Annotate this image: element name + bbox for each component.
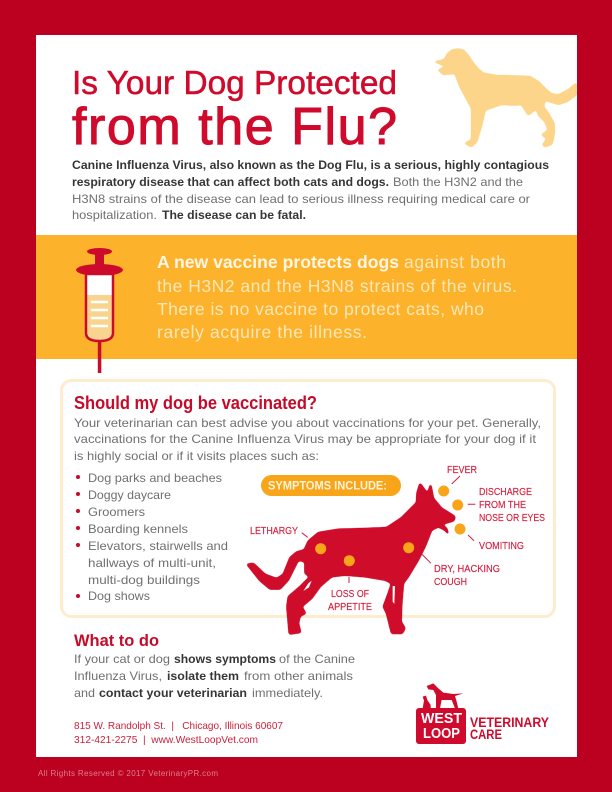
what to do text: shows symptoms <box>174 652 276 666</box>
logo: West Loop Veterinary Care: LOOP <box>423 726 460 742</box>
vaccination paragraph <box>74 416 541 463</box>
intro text <box>72 158 549 222</box>
symptom labels: LOSS OF <box>331 589 369 600</box>
what to do text: immediately. <box>252 686 323 700</box>
symptoms pill <box>261 475 401 496</box>
bullet list: Groomers <box>88 505 145 519</box>
what to do text: of the Canine <box>279 652 355 666</box>
bullet list <box>76 471 228 603</box>
title <box>72 64 397 156</box>
vaccine text <box>157 252 517 342</box>
what to do text: isolate them <box>167 669 239 683</box>
copyright footer: All Rights Reserved © 2017 VeterinaryPR.com <box>38 769 218 778</box>
bullet list: Dog parks and beaches <box>88 471 222 485</box>
logo: West Loop Veterinary Care: CARE <box>470 727 502 742</box>
symptoms pill: SYMPTOMS INCLUDE: <box>268 478 387 492</box>
symptom labels: LETHARGY <box>250 526 298 537</box>
symptom points near head <box>438 486 466 534</box>
bullet list: Doggy daycare <box>88 488 171 502</box>
contact details: 312-421-2275 | www.WestLoopVet.com <box>74 734 258 746</box>
intro text: hospitalization. <box>72 208 157 222</box>
symptom labels: DRY, HACKING <box>434 564 500 575</box>
title: Is Your Dog Protected <box>72 64 397 101</box>
intro text: H3N8 strains of the disease can lead to serious illness requiring medical care or <box>72 192 530 206</box>
symptom labels: VOMITING <box>479 541 524 552</box>
bullet list: Boarding kennels <box>88 522 188 536</box>
symptom labels: FROM THE <box>479 500 526 511</box>
intro text: Canine Influenza Virus, also known as the Dog Flu, is a serious, highly contagious <box>72 158 549 172</box>
icon: logo dogs <box>423 683 463 708</box>
contact details <box>74 720 283 746</box>
symptom labels: NOSE OR EYES <box>479 513 545 524</box>
icon: golden dog silhouette <box>435 49 576 147</box>
intro text: Both the H3N2 and the <box>393 175 523 189</box>
what to do text: If your cat or dog <box>74 652 170 666</box>
symptom labels: FEVER <box>447 465 477 476</box>
vaccination paragraph: is highly social or if it visits places such as: <box>74 449 319 463</box>
vaccine text: rarely acquire the illness. <box>157 322 367 342</box>
bullet list: hallways of multi-unit, <box>88 556 216 570</box>
logo: West Loop Veterinary Care: VETERINARY <box>470 715 549 730</box>
what to do text <box>74 652 355 700</box>
icon: red dog with symptom points <box>247 483 455 634</box>
icon: syringe <box>76 248 123 373</box>
vaccination paragraph: vaccinations for the Canine Influenza Virus may be appropriate for your dog if it <box>74 432 537 446</box>
vaccine text: A new vaccine protects dogs <box>157 252 399 272</box>
symptom labels <box>250 465 545 613</box>
contact details: 815 W. Randolph St. | Chicago, Illinois 60607 <box>74 720 283 732</box>
vaccine text: against both <box>404 252 506 272</box>
heading: should my dog be vaccinated: Should my dog be vaccinated? <box>74 393 317 413</box>
logo: West Loop Veterinary Care <box>416 683 549 744</box>
what to do text: Influenza Virus, <box>74 669 162 683</box>
symptom labels: DISCHARGE <box>479 487 532 498</box>
vaccination paragraph: Your veterinarian can best advise you about vaccinations for your pet. Generally, <box>74 416 541 430</box>
what to do text: from other animals <box>244 669 353 683</box>
what to do text: contact your veterinarian <box>99 686 247 700</box>
symptom leader lines <box>302 476 475 583</box>
panel: should my dog be vaccinated <box>62 380 554 616</box>
logo: West Loop Veterinary Care: WEST <box>421 711 462 727</box>
symptom labels: APPETITE <box>328 602 372 613</box>
title: from the Flu? <box>72 98 397 156</box>
bullet list: Dog shows <box>88 589 150 603</box>
bullet list: Elevators, stairwells and <box>88 539 228 553</box>
intro text: respiratory disease that can affect both cats and dogs. <box>72 175 389 189</box>
panel: vaccine band <box>36 235 577 373</box>
what to do text: and <box>74 686 95 700</box>
bullet list: multi-dog buildings <box>88 573 200 587</box>
intro text: The disease can be fatal. <box>162 208 306 222</box>
symptom labels: COUGH <box>434 577 467 588</box>
heading: what to do: What to do <box>74 631 159 650</box>
vaccine text: the H3N2 and the H3N8 strains of the virus. <box>157 276 517 296</box>
vaccine text: There is no vaccine to protect cats, who <box>157 299 484 319</box>
